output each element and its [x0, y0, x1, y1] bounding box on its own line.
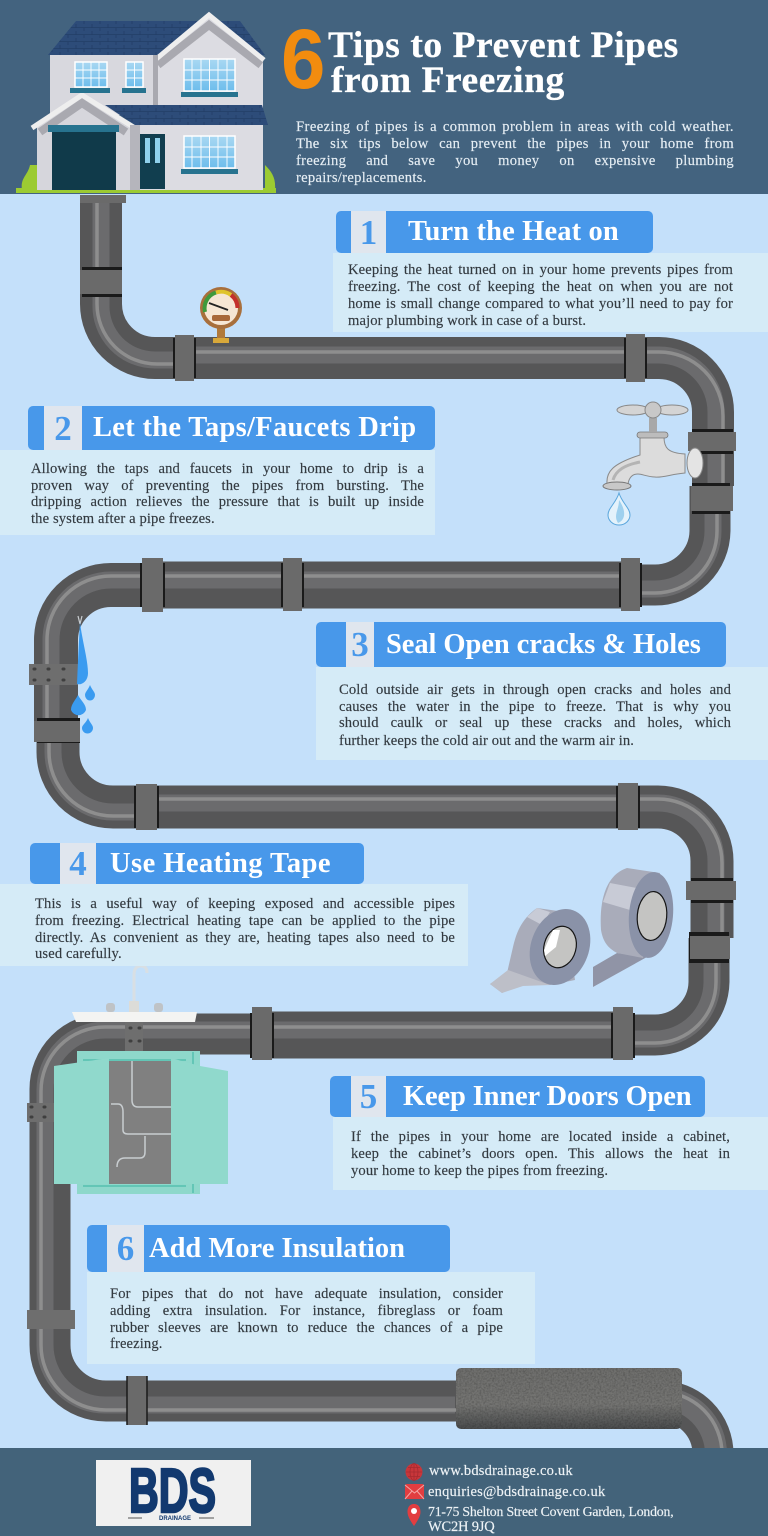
text block 2: dripping action relieves the pressure that is built up inside	[31, 494, 424, 510]
footer band	[0, 1448, 768, 1536]
heading bar 3: Seal Open cracks & Holes	[386, 628, 701, 660]
text block 4: This is a useful way of keeping exposed and accessible pipes	[35, 896, 455, 912]
panel: tip 4	[0, 843, 468, 966]
text block 6: rubber sleeves are known to reduce the chances of a pipe	[110, 1320, 503, 1336]
text block 2	[0, 450, 435, 535]
text block 4: from freezing. Electrical heating tape can be applied to the pipe	[35, 912, 455, 928]
heading bar 5: 5	[360, 1077, 377, 1116]
panel: tip 6	[87, 1225, 535, 1364]
text block 1: major plumbing work in case of a burst.	[348, 312, 586, 328]
header band	[0, 0, 768, 194]
intro text: Freezing of pipes is a common problem in areas with cold weather.	[296, 119, 734, 135]
text block 4: used carefully.	[35, 946, 122, 962]
website: www.bdsdrainage.co.uk	[429, 1463, 573, 1479]
text block 1: home is small change compared to what you’ll need to pay for	[348, 296, 733, 312]
pipe flanges	[27, 195, 736, 1425]
text block 5: keep the cabinet’s doors open. This allows the heat in	[351, 1146, 730, 1162]
title: Tips to Prevent Pipes	[328, 25, 679, 66]
heading bar 4: Use Heating Tape	[110, 848, 331, 878]
heading bar 6	[87, 1225, 450, 1272]
big orange number: 6	[281, 12, 325, 106]
text block 1: Keeping the heat turned on in your home prevents pipes from	[348, 262, 733, 278]
icon: location pin	[408, 1504, 420, 1526]
title	[328, 25, 679, 101]
text block 6	[87, 1272, 535, 1364]
heading bar 2: 2	[54, 408, 72, 448]
text block 3: further keeps the cold air out and the warm air in.	[339, 732, 634, 748]
address	[428, 1504, 673, 1535]
heading bar 2	[28, 406, 435, 450]
address: 71-75 Shelton Street Covent Garden, London,	[428, 1504, 673, 1519]
logo: DRAINAGE	[159, 1516, 191, 1522]
text block 3: Cold outside air gets in through open cracks and holes and	[339, 682, 731, 698]
icon: foam insulation sleeve	[456, 1368, 682, 1429]
text block 6: For pipes that do not have adequate insulation, consider	[110, 1286, 503, 1302]
icon: duct tape rolls	[490, 868, 677, 994]
icon: house	[16, 12, 276, 193]
text block 4	[0, 884, 468, 966]
text block 2: the system after a pipe freezes.	[31, 511, 215, 527]
heading bar 5	[330, 1076, 705, 1117]
heading bar 2: Let the Taps/Faucets Drip	[93, 412, 416, 443]
text block 5: your home to keep the pipes from freezing.	[351, 1162, 608, 1178]
icon: envelope	[404, 1484, 424, 1500]
text block 4: directly. As convenient as they are, heating tapes also need to be	[35, 930, 455, 946]
text block 3: should caulk or seal up these cracks and holes, which	[339, 714, 731, 730]
panel: tip 5	[330, 1076, 768, 1190]
intro text	[296, 119, 734, 186]
text block 6: freezing.	[110, 1336, 163, 1352]
intro text: The six tips below can prevent the pipes in your home from	[296, 136, 734, 152]
text block 5: If the pipes in your home are located inside a cabinet,	[351, 1128, 730, 1144]
title: from Freezing	[331, 60, 565, 101]
text block 5	[333, 1117, 768, 1190]
icon: leaking water drops	[71, 616, 95, 734]
text block 6: adding extra insulation. For instance, fibreglass or foam	[110, 1302, 503, 1318]
intro text: repairs/replacements.	[296, 170, 427, 186]
text block 3: causes the water in the pipe to freeze. That is why you	[339, 698, 731, 714]
address: WC2H 9JQ	[428, 1519, 494, 1535]
heading bar 6: 6	[117, 1229, 134, 1268]
text block 1: freezing. The cost of keeping the heat on when you are not	[348, 278, 733, 294]
panel: tip 2	[0, 406, 435, 535]
heading bar 3	[316, 622, 726, 667]
text block 2: Allowing the taps and faucets in your home to drip is a	[31, 461, 424, 477]
panel: tip 3	[316, 622, 768, 760]
icon: globe	[406, 1463, 422, 1481]
heading bar 5: Keep Inner Doors Open	[403, 1080, 691, 1112]
panel: tip 1	[333, 211, 768, 332]
text block 1	[333, 253, 768, 332]
heading bar 1: 1	[360, 212, 377, 252]
text block 3	[316, 667, 768, 760]
heading bar 6: Add More Insulation	[149, 1232, 405, 1264]
heading bar 1	[336, 211, 653, 253]
heading bar 4	[30, 843, 364, 884]
text block 2: proven way of preventing the pipes from bursting. The	[31, 478, 424, 494]
email: enquiries@bdsdrainage.co.uk	[428, 1484, 605, 1500]
heading bar 1: Turn the Heat on	[408, 216, 619, 247]
icon: dripping faucet	[603, 402, 703, 525]
heading bar 4: 4	[69, 844, 87, 883]
icon: pressure gauge	[200, 287, 242, 343]
intro text: freezing and save you money on expensive plumbing	[296, 153, 734, 169]
pipe run	[41, 195, 723, 1460]
icon: sink and open cabinet	[54, 966, 228, 1194]
heading bar 3: 3	[351, 625, 369, 664]
